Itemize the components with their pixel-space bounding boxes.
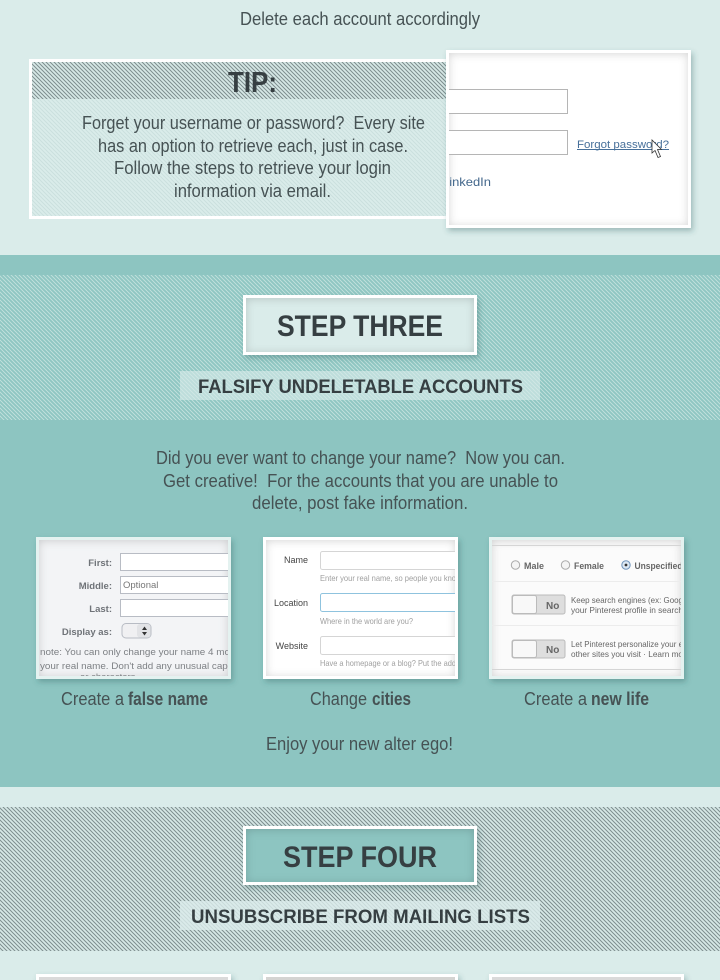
caption: create a new life: new life	[591, 689, 649, 709]
step three subtitle: FALSIFY UNDELETABLE ACCOUNTS	[198, 377, 523, 398]
screenshot: change location form: Where in the world are you?	[320, 616, 413, 626]
screenshot: change location form: Location	[274, 598, 308, 608]
header band: step three	[0, 275, 720, 420]
screenshot: false name form: note: You can only change your name 4 mo	[40, 647, 230, 658]
header band: step four	[0, 807, 720, 951]
screenshot: profile settings form: Keep search engines (ex: Goog	[571, 595, 683, 605]
intro paragraph	[156, 448, 565, 513]
screenshot: profile settings form: No	[546, 601, 559, 612]
step four title box: STEP FOUR	[283, 841, 437, 874]
screenshot: change location form: Have a homepage or a blog? Put the add	[320, 658, 456, 668]
intro paragraph: Did you ever want to change your name? Now you can.	[156, 448, 565, 468]
screenshot: forgot password login form: LinkedIn	[442, 175, 491, 189]
tip body text: information via email.	[174, 181, 331, 201]
panel: step three content	[0, 420, 720, 787]
screenshot: forgot password login form	[430, 50, 691, 228]
screenshot: false name form	[36, 537, 240, 683]
panel: tip	[30, 60, 450, 218]
screenshot: profile settings form: No	[546, 645, 559, 656]
tip body text: Forget your username or password? Every site	[82, 113, 425, 133]
caption: create a new life: Create a	[524, 689, 588, 709]
screenshot: false name form: Display as:	[62, 627, 112, 638]
tip body text	[82, 113, 425, 201]
screenshot: profile settings form	[489, 537, 684, 679]
caption: create a new life	[524, 689, 649, 709]
screenshot: false name form: First:	[88, 558, 112, 569]
tip body text: has an option to retrieve each, just in case.	[98, 136, 408, 156]
step four subtitle	[180, 901, 540, 930]
intro line: delete accounts: Delete each account accordingly	[240, 9, 480, 29]
screenshot: profile settings form: other sites you visit · Learn mo	[571, 649, 683, 659]
caption: create a false name: Create a	[61, 689, 125, 709]
tip body text: Follow the steps to retrieve your login	[114, 158, 391, 178]
step three title box: STEP THREE	[277, 310, 443, 343]
step three title box	[243, 295, 477, 355]
screenshot: change location form: Enter your real name, so people you kno	[320, 573, 456, 583]
screenshot: forgot password login form: Forgot password?	[577, 139, 669, 151]
caption: change cities: Change	[310, 689, 367, 709]
screenshot: false name form: or characters.	[80, 672, 138, 683]
screenshot: change location form	[263, 537, 470, 679]
intro paragraph: Get creative! For the accounts that you are unable to	[163, 471, 558, 491]
screenshot: change location form: Name	[284, 555, 308, 565]
screenshot: profile settings form: your Pinterest profile in search	[571, 605, 683, 615]
caption: change cities: cities	[372, 689, 411, 709]
screenshot: false name form: Optional	[123, 580, 158, 591]
step four subtitle: UNSUBSCRIBE FROM MAILING LISTS	[191, 907, 530, 928]
step four title box	[243, 826, 477, 885]
teal divider band	[0, 255, 720, 275]
screenshot row: mailing list cards, cut off at page bottom	[36, 974, 684, 980]
screenshot: profile settings form: Let Pinterest personalize your e	[571, 639, 683, 649]
caption: create a false name	[61, 689, 208, 709]
intro paragraph: delete, post fake information.	[252, 493, 468, 513]
screenshot: false name form: Last:	[89, 604, 112, 615]
tip heading: TIP:	[228, 67, 277, 99]
screenshot: false name form: your real name. Don't add any unusual capi	[40, 661, 230, 672]
screenshot: profile settings form: Male	[524, 561, 544, 571]
screenshot: profile settings form: Unspecified	[634, 561, 682, 571]
caption: create a false name: false name	[128, 689, 208, 709]
closing line: enjoy your alter ego: Enjoy your new alter ego!	[266, 734, 453, 754]
screenshot: profile settings form: Female	[574, 561, 604, 571]
icon: mouse cursor	[652, 140, 662, 158]
step three subtitle	[180, 371, 540, 400]
screenshot: false name form: Middle:	[79, 581, 112, 592]
caption: change cities	[310, 689, 411, 709]
screenshot: change location form: Website	[276, 641, 308, 651]
